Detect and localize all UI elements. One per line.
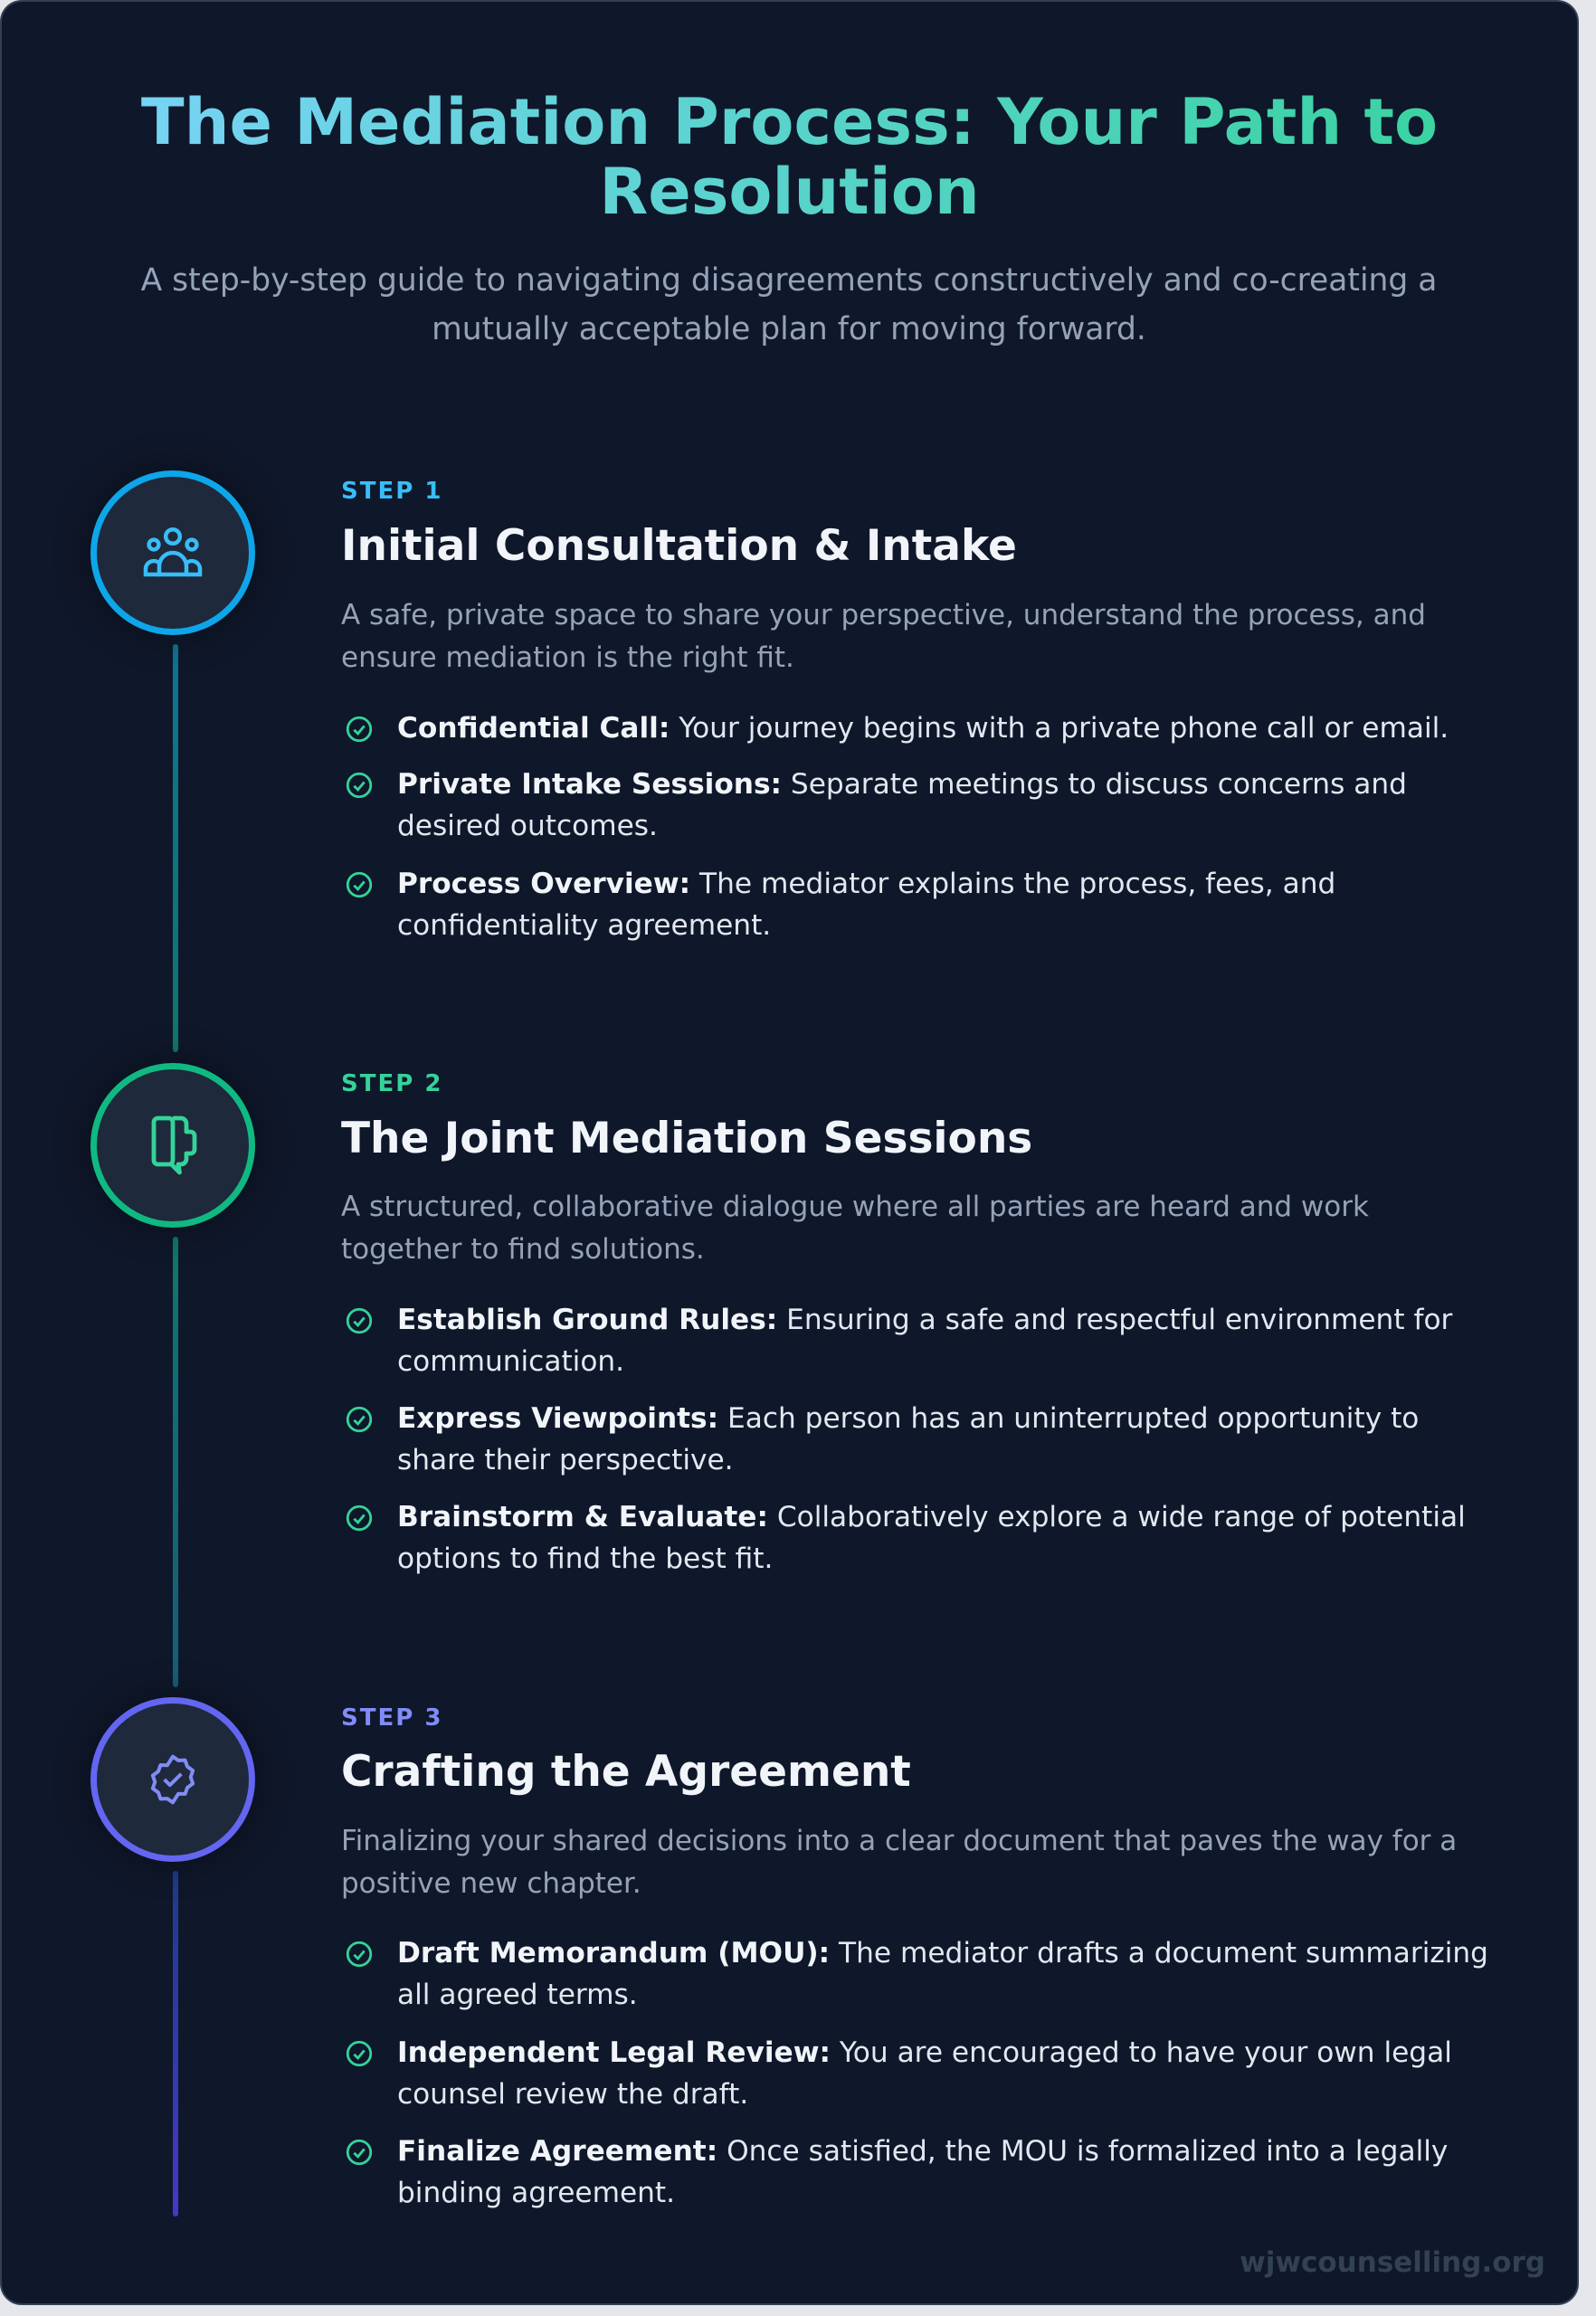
bullet: Finalize Agreement: Once satisfied, the MOU is formalized into a legally binding agreement. xyxy=(397,2135,1448,2209)
step 3 bullets xyxy=(346,1937,1488,2209)
step 2 bullets xyxy=(346,1304,1466,1575)
bullet: Private Intake Sessions: Separate meetings to discuss concerns and desired outcomes. xyxy=(397,768,1407,842)
step 1 label: STEP 1 xyxy=(341,478,442,505)
icon: step 2 conversation xyxy=(90,1063,255,1228)
step 1 description: A safe, private space to share your perspective, understand the process, and ensure mediation is the right fit. xyxy=(341,599,1426,674)
step 1 heading: Initial Consultation & Intake xyxy=(341,521,1017,571)
bullet: Express Viewpoints: Each person has an uninterrupted opportunity to share their perspective. xyxy=(397,1402,1419,1476)
bullet: Establish Ground Rules: Ensuring a safe and respectful environment for communication. xyxy=(397,1304,1452,1378)
bullet: Draft Memorandum (MOU): The mediator drafts a document summarizing all agreed terms. xyxy=(397,1937,1488,2011)
bullet: Independent Legal Review: You are encouraged to have your own legal counsel review the draft. xyxy=(397,2036,1452,2111)
title: Resolution xyxy=(599,155,980,229)
step 3 heading: Crafting the Agreement xyxy=(341,1747,911,1797)
step 2 label: STEP 2 xyxy=(341,1070,442,1097)
timeline line 1 xyxy=(173,644,178,1052)
step 1 bullets xyxy=(346,712,1449,942)
subtitle: A step-by-step guide to navigating disagreements constructively and co-creating a mutually acceptable plan for moving forward. xyxy=(141,262,1437,347)
icon: step 3 badge check xyxy=(90,1697,255,1862)
icon: step 1 people xyxy=(90,470,255,635)
title xyxy=(0,88,1579,227)
footer watermark: wjwcounselling.org xyxy=(1240,2246,1545,2279)
step 3 description: Finalizing your shared decisions into a clear document that paves the way for a positive new chapter. xyxy=(341,1825,1457,1900)
bullet: Confidential Call: Your journey begins with a private phone call or email. xyxy=(397,712,1449,745)
step 2 heading: The Joint Mediation Sessions xyxy=(341,1114,1032,1163)
bullet: Process Overview: The mediator explains the process, fees, and confidentiality agreement. xyxy=(397,868,1335,942)
timeline line 2 xyxy=(173,1237,178,1687)
timeline line 3 xyxy=(173,1871,178,2216)
step 2 description: A structured, collaborative dialogue where all parties are heard and work together to find solutions. xyxy=(341,1191,1369,1266)
step 3 label: STEP 3 xyxy=(341,1704,442,1732)
title: The Mediation Process: Your Path to xyxy=(141,85,1438,159)
bullet: Brainstorm & Evaluate: Collaboratively explore a wide range of potential options to find the best fit. xyxy=(397,1501,1466,1575)
